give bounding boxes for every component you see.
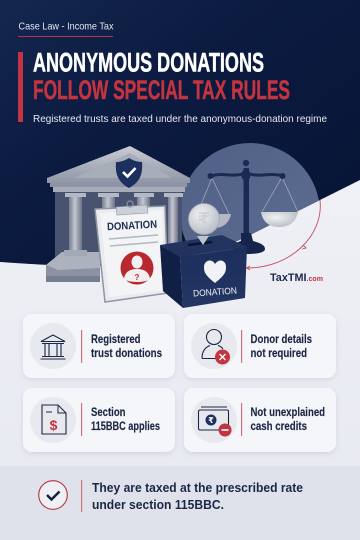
icon: heart [204, 260, 226, 283]
card: section 115BBC applies: Section [91, 405, 126, 419]
card: donor details not required: not required [250, 346, 307, 360]
conclusion text: They are taxed at the prescribed rate [92, 480, 303, 495]
card: section 115BBC applies: 115BBC applies [91, 419, 160, 433]
icon: check circle [39, 481, 67, 509]
icon: banknote with minus: ₹ [208, 416, 214, 425]
logo: TaxTMI.com [270, 272, 323, 284]
columns [64, 193, 183, 256]
conclusion text: under section 115BBC. [92, 497, 224, 512]
icon: bank building [46, 146, 190, 282]
red arc arrow [246, 200, 320, 270]
logo: TaxTMI.com: TaxTMI [270, 272, 306, 284]
subtitle: Registered trusts are taxed under the anonymous-donation regime [33, 114, 327, 125]
bottom conclusion band [0, 466, 360, 540]
icon: banknote with minus [198, 407, 232, 436]
roof [47, 146, 190, 183]
title [33, 48, 290, 105]
icon: rupee coin [188, 204, 220, 245]
box label: DONATION [193, 285, 237, 299]
conclusion text [92, 480, 303, 512]
eyebrow label [18, 22, 114, 37]
icon: scales of justice [197, 160, 298, 254]
donation clipboard: DONATION [107, 219, 158, 233]
accent bar [18, 52, 23, 122]
card: not unexplained cash credits [184, 388, 336, 452]
card: not unexplained cash credits: Not unexplained [250, 405, 325, 419]
icon: anonymous person: ? [135, 273, 140, 282]
donation box [160, 235, 247, 308]
card: donor details not required [184, 314, 336, 378]
icon: person with cross [202, 330, 230, 364]
logo: TaxTMI.com: .com [306, 274, 323, 283]
card: registered trust donations [23, 314, 175, 378]
card: registered trust donations: Registered [91, 332, 140, 346]
icon: bank outline [40, 335, 66, 359]
icon: rupee coin: ₹ [197, 209, 211, 231]
card: registered trust donations: trust donations [91, 346, 162, 360]
card: donor details not required: Donor details [250, 332, 312, 346]
icon: document with dollar [42, 405, 66, 434]
donation clipboard [95, 201, 168, 302]
icon: document with dollar: $ [50, 417, 58, 433]
eyebrow label: Case Law - Income Tax [18, 22, 114, 32]
card: not unexplained cash credits: cash credits [250, 419, 307, 433]
dark header background [0, 0, 360, 266]
icon: shield check [116, 158, 142, 188]
slate circle behind scales [182, 143, 319, 242]
card: section 115BBC applies [23, 388, 175, 452]
